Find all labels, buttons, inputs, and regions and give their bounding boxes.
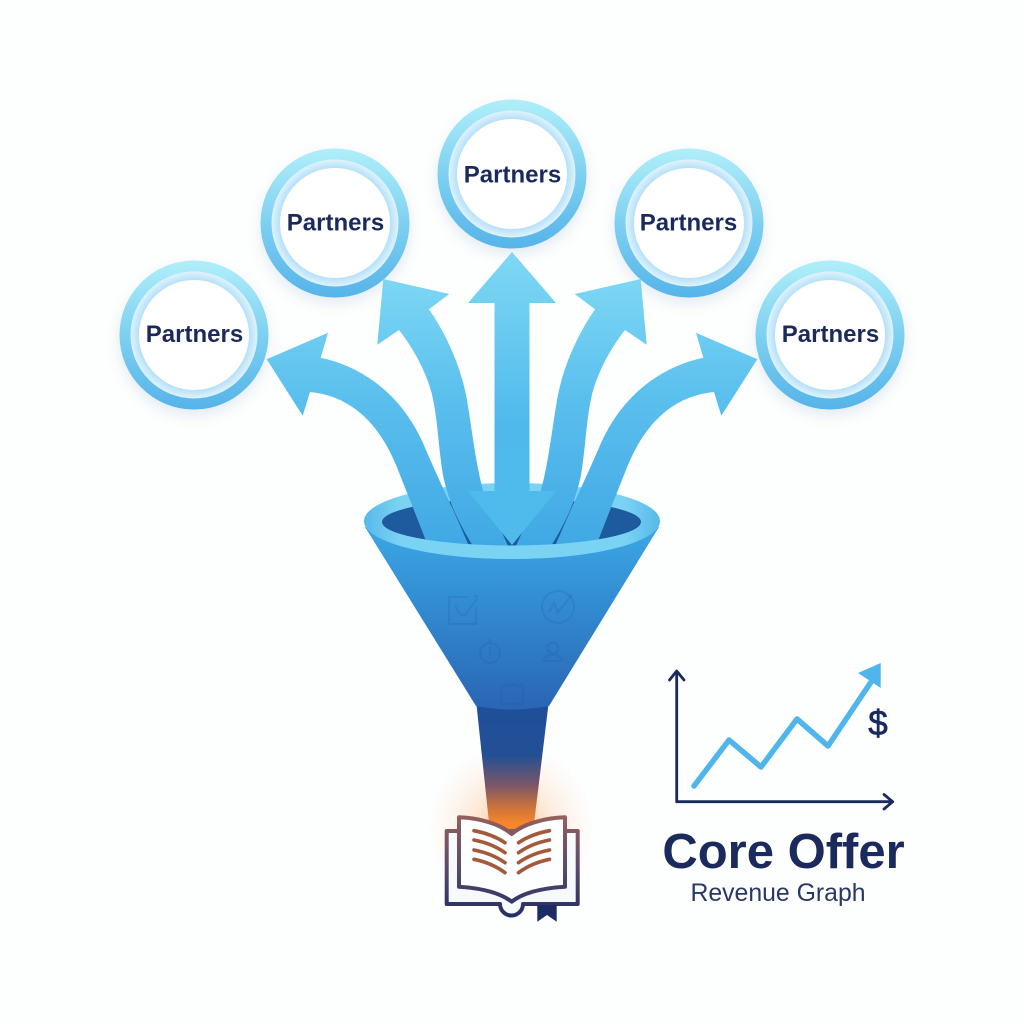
heading: Core Offer: Core Offer: [662, 825, 905, 879]
dollar sign: $: [868, 704, 888, 743]
arrow: center: [468, 252, 556, 545]
faint icon: clipboard: [501, 682, 523, 704]
icon: open book: [447, 817, 578, 922]
partner circle: inner left: [260, 148, 410, 303]
partner circle: inner right: [614, 148, 764, 303]
partner circle: center: [438, 100, 586, 254]
faint icon: progress check: [542, 591, 574, 623]
revenue chart: [670, 663, 893, 809]
partner circle: inner right: Partners: [640, 210, 737, 236]
partner circle: far right: Partners: [782, 321, 879, 348]
orange glow: [427, 744, 595, 912]
funnel rim back: [364, 483, 660, 559]
partner circle: far left: [120, 260, 268, 415]
book cover: [447, 831, 578, 916]
chart axes: [670, 671, 893, 809]
partner circle: far left: Partners: [146, 321, 243, 348]
funnel spout: [476, 700, 549, 832]
book pages: [459, 817, 565, 902]
subheading: Revenue Graph: Revenue Graph: [690, 880, 866, 907]
funnel opening: [382, 498, 641, 546]
faint icon: stopwatch: [480, 638, 500, 663]
faint icon: checked box: [449, 596, 477, 624]
growth arrowhead: [858, 663, 881, 688]
growth line: [694, 682, 871, 786]
arrow: inner right: [516, 279, 647, 546]
funnel rim front: [364, 521, 660, 559]
arrow: inner left: [377, 279, 508, 546]
bookmark: [537, 905, 557, 922]
partner circle: inner left: Partners: [287, 210, 384, 236]
faint icon: person: [544, 642, 562, 661]
funnel cone: [365, 527, 659, 710]
partner circle: center: Partners: [464, 162, 561, 188]
arrow: far left: [267, 333, 469, 546]
page text lines: [474, 831, 550, 873]
arrow: far right: [555, 333, 757, 546]
partner circle: far right: [756, 260, 904, 415]
